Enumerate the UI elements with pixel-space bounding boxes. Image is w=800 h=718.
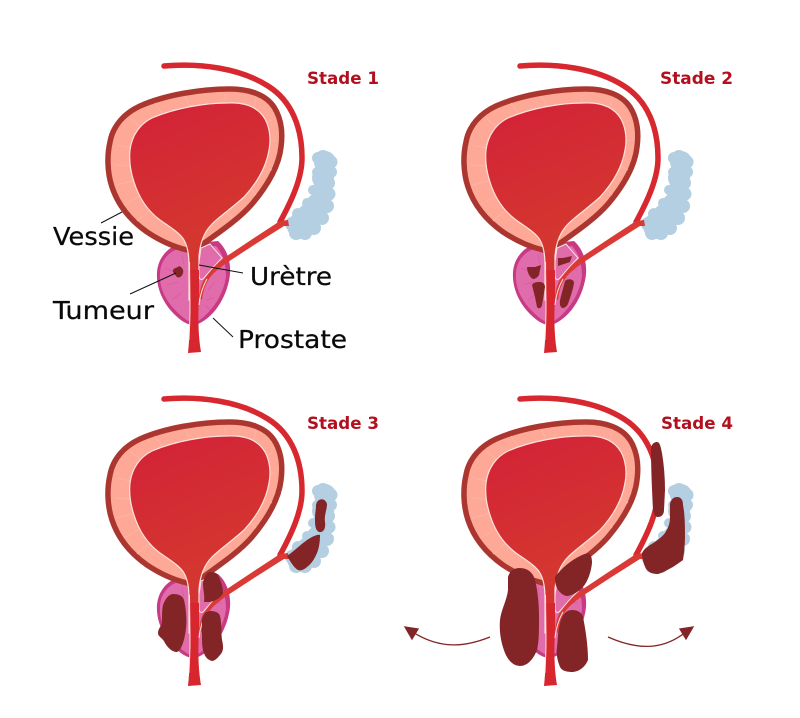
heading: Stade 2: Stade 2 xyxy=(660,69,733,89)
organ diagram stade 3 xyxy=(108,398,338,686)
panel: stade 2 xyxy=(464,65,733,353)
label: Prostate xyxy=(213,318,347,354)
tumour stade 1 xyxy=(173,266,183,277)
tumours stade 3 xyxy=(158,499,327,661)
arrow: left xyxy=(405,627,490,645)
label: Vessie: Vessie xyxy=(53,222,134,251)
organ diagram stade 4 xyxy=(464,398,694,686)
heading: Stade 1: Stade 1 xyxy=(307,69,379,89)
panel: stade 1 xyxy=(52,65,379,354)
organ diagram stade 1 xyxy=(108,65,338,353)
label: Tumeur: Tumeur xyxy=(52,296,155,325)
tumours stade 2 xyxy=(527,256,574,308)
label: Urètre: Urètre xyxy=(250,262,332,291)
organ diagram stade 2 xyxy=(464,65,694,353)
heading: Stade 3: Stade 3 xyxy=(307,414,379,434)
panel: stade 4 xyxy=(405,398,733,686)
label: Tumeur xyxy=(52,273,176,325)
panel: stade 3 xyxy=(108,398,379,686)
arrow: right xyxy=(608,627,693,646)
label: Prostate: Prostate xyxy=(238,325,347,354)
tumours stade 4 xyxy=(500,442,685,672)
heading: Stade 4: Stade 4 xyxy=(661,414,733,434)
label: Urètre xyxy=(199,262,332,291)
